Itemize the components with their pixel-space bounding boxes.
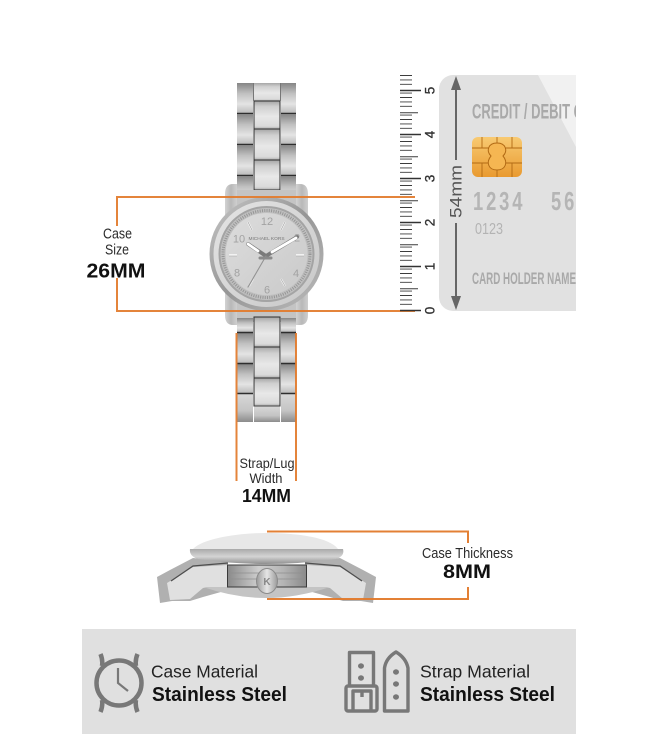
dial numerals: 10 <box>233 234 245 246</box>
strap material text <box>420 662 555 706</box>
lower bracelet <box>237 317 296 422</box>
card chip <box>472 137 522 177</box>
thickness label: 8MM <box>443 561 491 583</box>
dial numerals: 4 <box>293 268 299 280</box>
case material text: Case Material <box>151 662 258 682</box>
case size label: Case <box>103 226 132 242</box>
side bracelet left <box>157 558 228 603</box>
upper bracelet <box>237 83 296 206</box>
ruler numbers: 4 <box>422 130 438 138</box>
watch hands <box>248 237 297 287</box>
card small number: 0123 <box>475 221 503 238</box>
thickness label <box>422 546 513 583</box>
watch case and dial <box>210 197 324 311</box>
dial numerals <box>233 216 300 296</box>
strap width label: Strap/Lug <box>240 455 294 471</box>
ruler numbers <box>422 87 438 314</box>
dial numerals: 2 <box>294 232 300 244</box>
case size bracket <box>117 197 415 311</box>
strap width label: Width <box>250 470 282 486</box>
ruler numbers: 2 <box>422 219 438 226</box>
lugs <box>225 184 237 325</box>
case size label: 26MM <box>86 260 146 282</box>
crown: K <box>263 577 271 588</box>
side bezel <box>190 549 343 564</box>
credit card: 56 <box>551 187 577 216</box>
card title: CREDIT / DEBIT C <box>472 100 583 124</box>
thickness bracket <box>267 532 468 599</box>
crown <box>256 568 278 594</box>
ruler numbers: 3 <box>422 175 438 182</box>
side crystal <box>193 533 338 549</box>
strap width label: 14MM <box>242 485 291 506</box>
side case back <box>203 587 330 598</box>
dial numerals: 12 <box>261 216 273 228</box>
side case middle <box>228 565 306 587</box>
card number: 1234 <box>473 187 525 216</box>
side bracelet right <box>305 558 376 603</box>
card shine <box>538 75 576 147</box>
54mm arrow <box>446 76 466 310</box>
ruler numbers: 1 <box>422 263 438 270</box>
ruler numbers: 5 <box>422 87 438 94</box>
case material text <box>151 662 287 706</box>
dial markers <box>229 222 304 286</box>
materials panel <box>82 629 576 734</box>
thickness label: Case Thickness <box>422 546 513 562</box>
card holder name: CARD HOLDER NAME <box>472 270 576 288</box>
credit card <box>439 75 583 311</box>
case material text: Stainless Steel <box>152 684 287 706</box>
case size label <box>86 226 146 282</box>
dial brand text: MICHAEL KORS <box>248 236 285 242</box>
54mm label: 54mm <box>446 165 466 218</box>
strap material text: Strap Material <box>420 662 530 682</box>
icon: strap and buckle <box>346 652 408 711</box>
ruler numbers: 0 <box>422 307 438 314</box>
ruler <box>400 76 438 314</box>
strap material text: Stainless Steel <box>420 684 555 706</box>
strap width lines <box>236 333 296 481</box>
dial numerals: 6 <box>264 284 270 296</box>
icon: watch case <box>96 654 142 712</box>
watch side view <box>157 533 376 603</box>
dial numerals: 8 <box>234 268 240 280</box>
case size label: Size <box>105 242 129 258</box>
strap width label <box>240 455 294 506</box>
watch front view <box>210 83 324 422</box>
